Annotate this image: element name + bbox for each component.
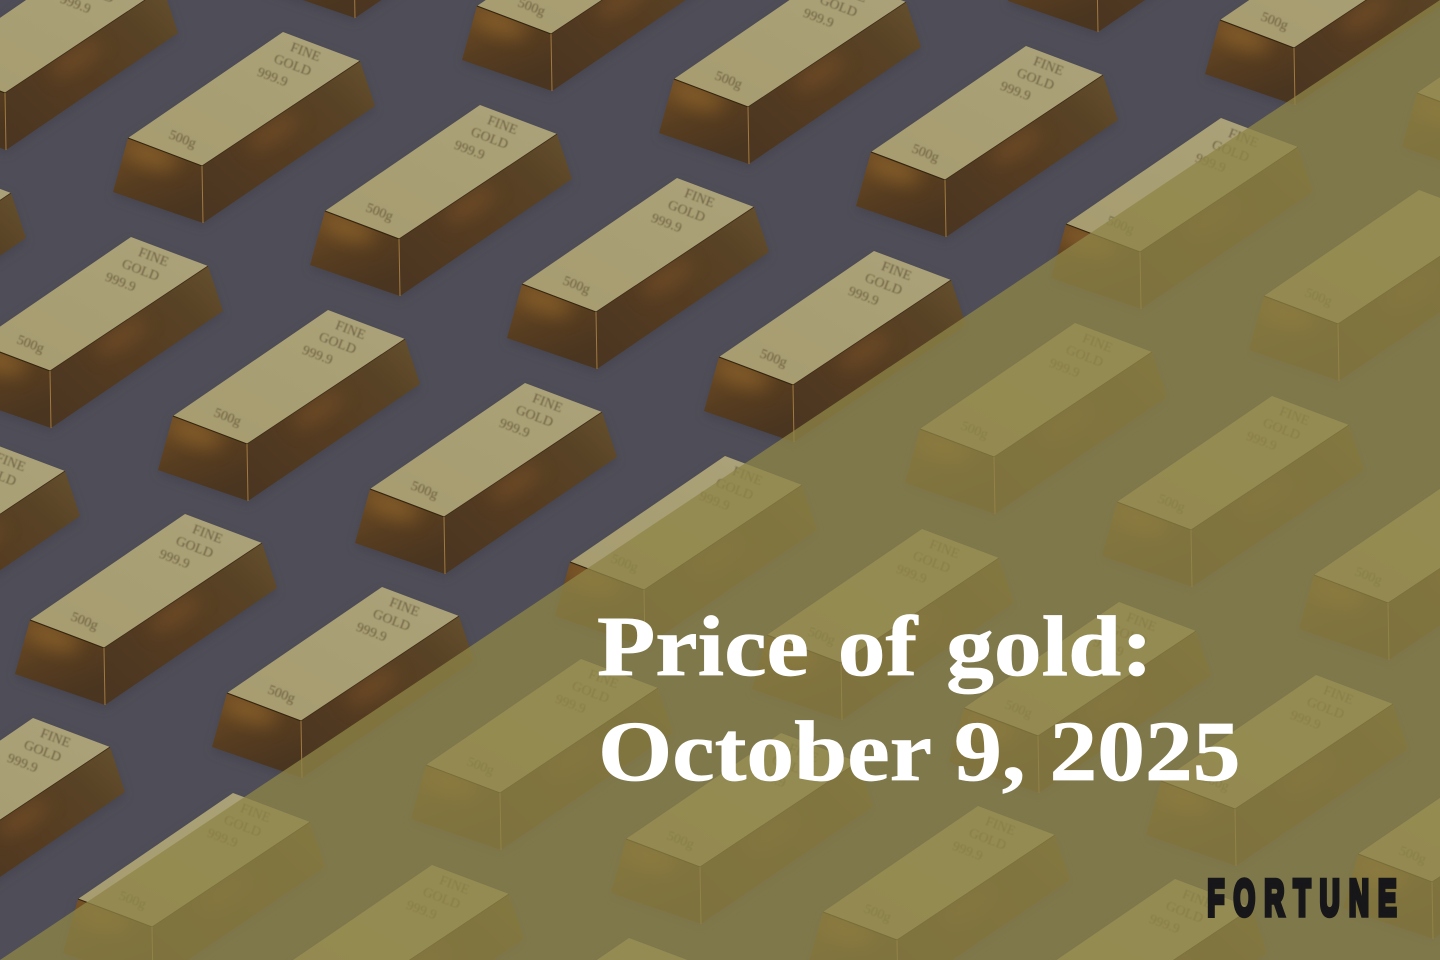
gold bar row 3 item 3: 999.9 — [300, 343, 335, 368]
gold bar row 2 item 2: GOLD — [271, 52, 313, 80]
gold bar row 4 item 5: 999.9 — [753, 766, 788, 791]
gold bar row 2 item 3 — [310, 105, 572, 300]
gold bar row 5 item 3: FINE — [437, 873, 471, 898]
gold bar row 2 item 5 — [704, 251, 966, 446]
title: October 9, 2025 — [598, 703, 1240, 799]
gold bar row 2 item 5: 999.9 — [846, 284, 881, 309]
gold bar row 5 item 3: GOLD — [420, 885, 462, 913]
gold bar row 3 item 4: 500g — [408, 479, 440, 503]
gold bar row 3 item 7: 999.9 — [1091, 635, 1126, 660]
gold bar row 5 item 2: 999.9 — [205, 826, 240, 851]
title: Price of gold: — [597, 598, 1153, 694]
gold bar row 2 item 6: 500g — [958, 419, 990, 443]
gold bar row 4 item 3 — [212, 587, 474, 782]
gold bar row 3 item 3: GOLD — [316, 330, 358, 358]
gold bar row 4 item 7 — [1005, 879, 1267, 960]
gold bar row 3 item 6: FINE — [927, 537, 961, 562]
gold bar row 3 item 4 — [355, 383, 617, 578]
gold bar row 3 item 5: 999.9 — [697, 489, 732, 514]
gold bar row 3 item 4: 999.9 — [497, 416, 532, 441]
gold bar row 2 item 6: 999.9 — [1047, 356, 1082, 381]
gold bar row 1 item 6 — [1249, 190, 1440, 385]
gold bar row 3 item 2: GOLD — [119, 257, 161, 285]
gold bar row 2 item 4 — [507, 178, 769, 373]
gold bar row 2 item 1 — [0, 0, 178, 154]
gold bar row 4 item 4 — [411, 659, 673, 854]
gold bar row 3 item 8: 500g — [1199, 771, 1231, 795]
gold bar row 1 item 4: 500g — [909, 142, 941, 166]
gold bar row 5 item 3: 999.9 — [404, 898, 439, 923]
gold bar row 2 item 3: FINE — [485, 113, 519, 138]
gold bar row 4 item 6: 999.9 — [950, 839, 985, 864]
gold bar row 1 item 5 — [1051, 118, 1313, 313]
gold bar row 2 item 2: 999.9 — [255, 65, 290, 90]
gold bar row 2 item 3: 500g — [363, 201, 395, 225]
gold bar row 5 item 1: FINE — [38, 726, 72, 751]
gold bar row 3 item 4: FINE — [530, 391, 564, 416]
gold bar row 1 item 2 — [462, 0, 724, 95]
gold bar row 4 item 6: GOLD — [966, 826, 1008, 854]
gold bar row 4 item 2: FINE — [190, 522, 224, 547]
gold bar row 4 item 5: GOLD — [769, 753, 811, 781]
gold bar row 4 item 2: 999.9 — [157, 547, 192, 572]
gold bar row 3 item 4: GOLD — [513, 403, 555, 431]
gold bar row 2 item 7: GOLD — [1260, 416, 1302, 444]
gold bar row 4 item 7: FINE — [1180, 887, 1214, 912]
gold bar row 2 item 8 — [1299, 469, 1440, 664]
gold bar row 2 item 8: 500g — [1352, 565, 1384, 589]
gold bar row 5 item 4 — [459, 938, 721, 960]
gold bar row 2 item 2 — [113, 32, 375, 227]
gold bar row 3 item 7: 500g — [1002, 698, 1034, 722]
gold bar row 3 item 1 — [0, 164, 26, 359]
gold bar row 4 item 3: FINE — [387, 595, 421, 620]
gold bar row 4 item 5: 500g — [664, 829, 696, 853]
gold bar row 5 item 1 — [0, 718, 125, 913]
gold bar row 4 item 2: 500g — [68, 610, 100, 634]
gold bar row 3 item 5: 500g — [608, 552, 640, 576]
gold bar row 4 item 7: 999.9 — [1147, 912, 1182, 937]
gold bar row 3 item 2: 500g — [14, 333, 46, 357]
gold bar row 1 item 3: 500g — [712, 69, 744, 93]
gold bar row 4 item 6: 500g — [861, 902, 893, 926]
gold bar row 3 item 3: FINE — [333, 318, 367, 343]
gold bar row 2 item 7 — [1102, 396, 1364, 591]
gold bar row 3 item 3 — [158, 310, 420, 505]
gold bar row 4 item 5 — [611, 733, 873, 928]
gold bar row 3 item 6: 999.9 — [894, 562, 929, 587]
gold bar row 3 item 5: GOLD — [713, 476, 755, 504]
gold bar row 3 item 5: FINE — [730, 464, 764, 489]
gold bar top row item 3 — [1402, 0, 1440, 182]
gold bar top row item 1 — [1008, 0, 1270, 36]
gold bar row 4 item 3: 500g — [265, 683, 297, 707]
logo: FORTUNE: FORTUNE — [1208, 869, 1406, 926]
gold bar row 3 item 6: 500g — [805, 625, 837, 649]
gold bar row 4 item 3: GOLD — [370, 607, 412, 635]
gold bar row 1 item 1 — [265, 0, 527, 22]
gold bar row 1 item 4: GOLD — [1014, 66, 1056, 94]
gold bar row 1 item 4: 999.9 — [998, 79, 1033, 104]
gold bar row 2 item 6: FINE — [1080, 331, 1114, 356]
gold bar row 2 item 4: FINE — [682, 186, 716, 211]
gold bar row 1 item 3 — [659, 0, 921, 168]
gold bar row 5 item 2: GOLD — [221, 813, 263, 841]
gold bar row 3 item 8: GOLD — [1304, 695, 1346, 723]
gold bar row 2 item 5: 500g — [757, 347, 789, 371]
gold bar row 2 item 5: FINE — [879, 259, 913, 284]
gold bar row 4 item 2 — [15, 514, 277, 709]
gold bar row 1 item 5: 500g — [1104, 214, 1136, 238]
gold bar row 1 item 4 — [856, 46, 1118, 241]
gold bar row 3 item 3: 500g — [211, 406, 243, 430]
gold bar row 5 item 2 — [63, 793, 325, 960]
gold bar row 4 item 4: 500g — [464, 755, 496, 779]
gold bar top row item 2: 500g — [1258, 10, 1290, 34]
gold bar row 3 item 7: GOLD — [1107, 622, 1149, 650]
gold bar row 2 item 4: 500g — [560, 274, 592, 298]
gold bar row 1 item 4: FINE — [1031, 54, 1065, 79]
gold bar row 2 item 4: 999.9 — [649, 211, 684, 236]
gold bar row 3 item 9: 500g — [1396, 844, 1428, 868]
gold bar row 3 item 9 — [1343, 748, 1440, 943]
gold bar row 2 item 6: GOLD — [1063, 343, 1105, 371]
gold bar top row item 2 — [1205, 0, 1440, 109]
gold bar row 4 item 6: FINE — [983, 814, 1017, 839]
gold bar row 3 item 2 — [0, 237, 223, 432]
gold bar row 1 item 6: 500g — [1302, 286, 1334, 310]
gold bar row 5 item 1: GOLD — [21, 738, 63, 766]
gold bar row 3 item 7: FINE — [1124, 610, 1158, 635]
gold bar row 3 item 7 — [949, 602, 1211, 797]
gold bar row 1 item 5: FINE — [1226, 126, 1260, 151]
gold bar row 3 item 8: FINE — [1321, 683, 1355, 708]
gold bar row 1 item 5: GOLD — [1209, 138, 1251, 166]
gold bar row 3 item 2: FINE — [136, 245, 170, 270]
gold bar row 5 item 2: FINE — [238, 801, 272, 826]
gold bar row 3 item 8 — [1146, 675, 1408, 870]
gold bar row 2 item 7: FINE — [1277, 404, 1311, 429]
gold bar row 4 item 7: GOLD — [1163, 899, 1205, 927]
gold bar row 3 item 2: 999.9 — [103, 270, 138, 295]
gold bar row 2 item 3: 999.9 — [452, 138, 487, 163]
gold bar row 4 item 4: FINE — [586, 667, 620, 692]
gold bar row 2 item 7: 999.9 — [1244, 429, 1279, 454]
gold bar row 2 item 3: GOLD — [468, 125, 510, 153]
gold bar row 2 item 7: 500g — [1155, 492, 1187, 516]
gold bar row 2 item 5: GOLD — [862, 271, 904, 299]
gold bar row 2 item 2: 500g — [166, 128, 198, 152]
gold bar row 3 item 6: GOLD — [910, 549, 952, 577]
gold bar row 4 item 4: 999.9 — [553, 692, 588, 717]
title — [597, 598, 1240, 799]
gold bar row 4 item 3: 999.9 — [354, 620, 389, 645]
gold bar row 2 item 2: FINE — [288, 40, 322, 65]
gold bar row 2 item 6 — [905, 323, 1167, 518]
gold bar row 3 item 5 — [555, 456, 817, 651]
gold bar row 3 item 6 — [752, 529, 1014, 724]
gold bar row 5 item 2: 500g — [116, 889, 148, 913]
gold bar row 1 item 5: 999.9 — [1193, 151, 1228, 176]
gold bar row 2 item 4: GOLD — [665, 198, 707, 226]
gold bar row 4 item 1 — [0, 442, 80, 637]
gold bar row 4 item 4: GOLD — [569, 679, 611, 707]
gold bar row 5 item 3 — [262, 865, 524, 960]
gold bar row 1 item 3: 999.9 — [801, 6, 836, 31]
gold bar row 4 item 2: GOLD — [173, 534, 215, 562]
gold bar row 5 item 1: 999.9 — [5, 751, 40, 776]
gold bar row 4 item 5: FINE — [786, 741, 820, 766]
gold bar row 3 item 8: 999.9 — [1288, 708, 1323, 733]
gold bar row 4 item 6 — [808, 806, 1070, 960]
